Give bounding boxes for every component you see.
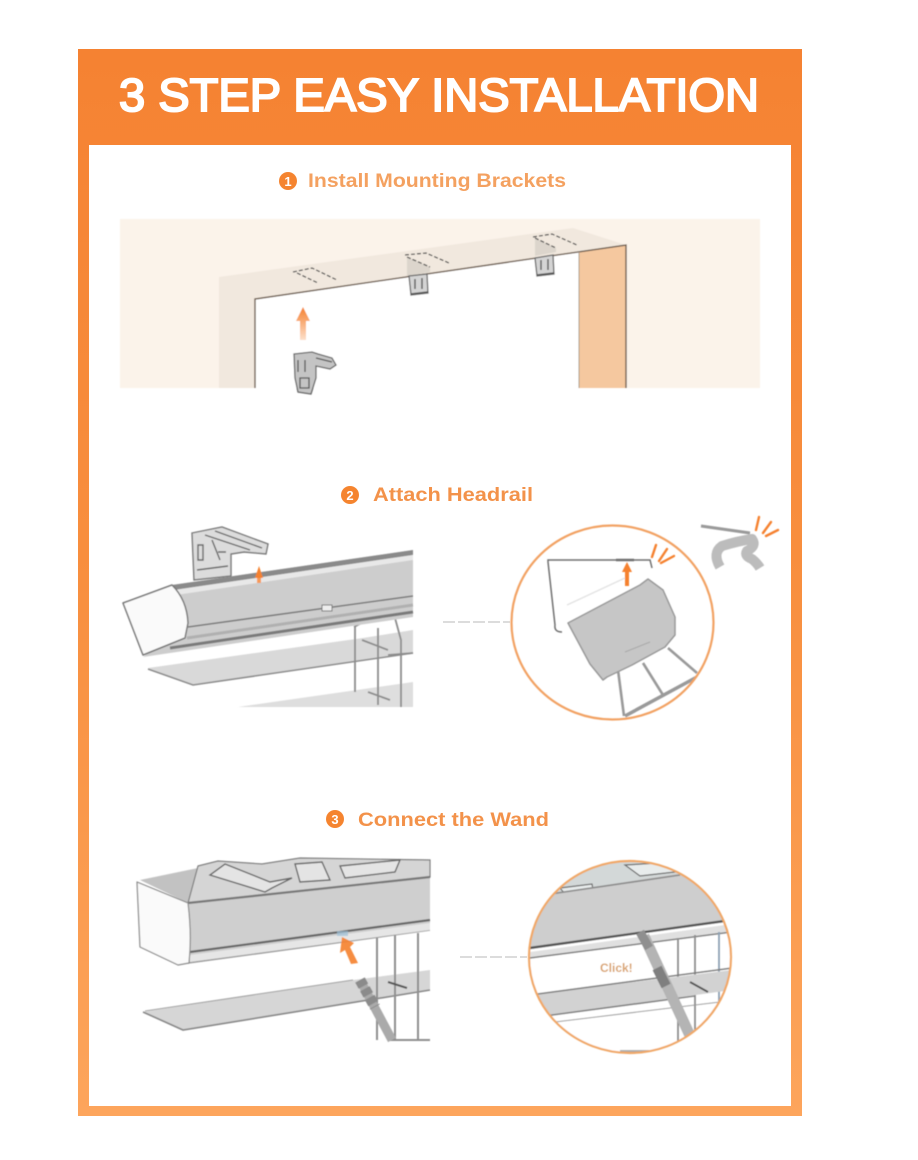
headrail body [143,550,413,657]
slat [143,970,430,1030]
cords [377,933,430,1040]
loose bracket [294,352,336,394]
bracket [192,527,268,580]
up arrow [296,307,310,340]
step 2 detail circle [512,526,714,720]
end cap [123,585,188,655]
connection arrow [340,937,358,964]
lower slats and cords [148,630,413,685]
step 2 heading: Attach Headrail [373,485,533,506]
step 1 heading: 1 [284,174,292,189]
step 2 illustration: headrail and bracket [123,527,413,707]
step 3 illustration: headrail and wand [137,858,430,1040]
headrail top [140,860,430,903]
wand [360,980,392,1040]
dashed connector [460,956,527,958]
title: 3 STEP EASY INSTALLATION [119,69,759,121]
mounted bracket marks [293,234,577,283]
dashed connector [443,621,510,623]
step 1 illustration: wall opening with brackets [120,219,760,394]
hook detail icon [701,517,778,568]
step 1 heading: Install Mounting Brackets [308,171,566,192]
small up arrow [255,566,263,578]
step 3 heading: Connect the Wand [358,810,549,831]
step 3 heading: 3 [331,812,339,827]
headrail front [188,877,430,963]
click ticks [652,545,674,563]
step 2 heading: 2 [346,488,354,503]
infographic [78,49,802,1116]
click label: Click! [600,961,633,975]
step 3 detail circle [528,860,732,1054]
orange frame [78,49,802,1116]
end cap [137,882,190,965]
